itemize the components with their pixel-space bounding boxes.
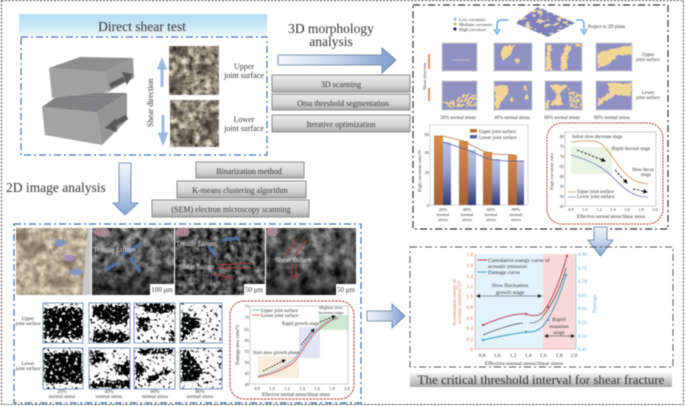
chart: high curvature ratio bars: Lower joint surface xyxy=(479,136,517,141)
chart: high curvature ratio versus stress ratio: 65 xyxy=(560,164,565,169)
chart: high curvature ratio bars: 60 xyxy=(424,132,430,137)
chart: high curvature ratio versus stress ratio: 80 xyxy=(560,134,565,139)
image: SEM tensile and shear failure: 50 μm xyxy=(245,286,264,294)
chart: high curvature ratio versus stress ratio: 2.0 xyxy=(652,207,659,212)
labels: binary row upper: joint surface xyxy=(15,322,41,327)
chart: damage area ratio: Upper joint surface xyxy=(261,309,298,314)
icon: downward shear arrow xyxy=(160,115,166,142)
chart: high curvature ratio versus stress ratio: 0.8 xyxy=(568,207,575,212)
chart: high curvature ratio versus stress ratio: 70 xyxy=(560,154,565,159)
chart: energy and damage curves: Rapid xyxy=(552,317,566,323)
heading: 3D morphology analysis: analysis xyxy=(309,34,353,49)
chart: energy and damage curves: 0 xyxy=(470,347,473,353)
labels: upper joint surface: joint surface xyxy=(635,58,660,63)
chart: high curvature ratio versus stress ratio: 1.8 xyxy=(638,207,645,212)
image: SEM tensile failure xyxy=(92,228,174,295)
method box: Otsu threshold segmentation: Otsu threshold segmentation xyxy=(297,99,389,108)
labels: binary image columns: 60% xyxy=(150,390,160,395)
chart: high curvature ratio bars: 60% xyxy=(487,207,495,212)
labels: binary image columns: normal stress xyxy=(96,395,122,400)
chart: high curvature ratio versus stress ratio xyxy=(547,123,663,224)
chart: damage area ratio: increase stage xyxy=(318,310,344,315)
chart: high curvature ratio bars: 40% xyxy=(463,207,471,212)
chart: energy and damage curves: Cumulative energy curve of xyxy=(488,257,550,264)
chart: high curvature ratio versus stress ratio: 75 xyxy=(560,144,565,149)
chart: energy and damage curves: 1.6 xyxy=(540,353,547,359)
method box: K-means clustering algorithm xyxy=(177,181,306,198)
image: SEM tensile failure: Tensile failure xyxy=(93,245,137,254)
arrow: right projection xyxy=(576,20,587,34)
chart: high curvature ratio bars: 20% xyxy=(439,207,447,212)
labels: binary image columns: 80% xyxy=(195,390,205,395)
chart: energy and damage curves: 0.55 xyxy=(578,320,587,326)
chart: damage area ratio: Start slow growth phase xyxy=(253,351,299,356)
icon: shear specimen blocks xyxy=(42,57,134,145)
chart: energy and damage curves: growth stage xyxy=(496,290,525,296)
heading: 3D morphology analysis: 3D morphology xyxy=(288,21,374,36)
label: project to 2D plane: Project to 2D plane xyxy=(588,25,625,30)
labels: lower joint surface: Lower xyxy=(642,91,655,96)
chart: energy and damage curves: 1.4 xyxy=(525,353,532,359)
labels: binary row lower: Lower xyxy=(21,362,35,367)
image: joint surface photo xyxy=(15,228,91,295)
method box: K-means clustering algorithm: K-means clustering algorithm xyxy=(192,186,289,195)
label: upper joint surface: Upper xyxy=(234,62,254,71)
chart: high curvature ratio bars: stress xyxy=(438,217,448,222)
panel: direct shear test xyxy=(19,14,267,155)
chart: damage area ratio: 0.8 xyxy=(254,386,261,391)
chart: damage area ratio: 1.0 xyxy=(269,386,276,391)
chart: high curvature ratio versus stress ratio: Upper joint surface xyxy=(577,190,614,195)
chart: damage area ratio: 65 xyxy=(244,327,250,332)
image: SEM tensile failure: 100 μm xyxy=(151,286,173,294)
labels: normal stress columns: 20% normal stress xyxy=(440,116,476,121)
chart: high curvature ratio versus stress ratio: 1.2 xyxy=(596,207,602,212)
method box: binarization method xyxy=(196,162,304,178)
image: SEM tensile and shear failure: Tensile failure xyxy=(176,240,216,248)
chart: damage area ratio: 60 xyxy=(244,338,250,343)
chart: damage area ratio: Rapid growth stage xyxy=(282,322,319,327)
chart: damage area ratio: Lower joint surface xyxy=(261,314,299,319)
image: upper joint surface xyxy=(168,45,219,95)
panel: 3D morphology results xyxy=(413,5,668,229)
labels: binary row lower: joint surface xyxy=(15,367,41,372)
dash-dot frame of test panel xyxy=(21,37,267,155)
chart: high curvature ratio versus stress ratio: 60 xyxy=(560,174,565,179)
chart: high curvature ratio bars: normal xyxy=(461,212,474,217)
labels: binary image columns: normal stress xyxy=(142,395,168,400)
chart: energy and damage curves: 1.6 xyxy=(467,263,473,269)
chart: damage area ratio: 50 xyxy=(244,360,250,365)
chart: high curvature ratio bars: 20 xyxy=(424,170,430,175)
label: upper joint surface: joint surface xyxy=(223,71,264,80)
chart: high curvature ratio bars: 80% xyxy=(512,207,520,212)
chart: damage area ratio: 75 xyxy=(244,304,250,309)
chart: energy and damage curves: Damage curve xyxy=(488,270,520,276)
labels: binary image columns: normal stress xyxy=(49,395,75,400)
chart: high curvature ratio versus stress ratio: stage xyxy=(641,173,651,178)
chart: high curvature ratio versus stress ratio: 55 xyxy=(560,184,565,189)
chart: energy and damage curves: Slow fluctuation xyxy=(492,282,529,289)
legend: curvature classes: High curvature xyxy=(459,27,486,32)
chart: energy and damage curves: 0.2 xyxy=(467,337,473,343)
chart: energy and damage curves: 0.75 xyxy=(578,266,587,272)
chart: energy and damage curves: 0.4 xyxy=(467,326,473,332)
chart: high curvature ratio bars: normal xyxy=(510,212,523,217)
binary images: lower row xyxy=(43,348,222,389)
chart: high curvature ratio bars: stress xyxy=(462,217,472,222)
panel: critical threshold interval xyxy=(410,247,673,387)
chart: high curvature ratio versus stress ratio: Lower joint surface xyxy=(577,195,615,200)
chart: damage area ratio: Damage area ratio/% xyxy=(236,325,241,365)
method box: Otsu threshold segmentation xyxy=(272,94,410,110)
chart: energy and damage curves: 1.0 xyxy=(494,353,501,359)
heading band: critical threshold interval: The critical threshold interval for shear fracture xyxy=(418,372,665,387)
labels: binary image columns: normal stress xyxy=(187,395,213,400)
image: SEM shear failure: Shear failure xyxy=(275,256,311,264)
chart: damage area ratio: 55 xyxy=(244,349,250,354)
chart: energy and damage curves: 1.2 xyxy=(510,353,517,359)
chart: high curvature ratio versus stress ratio: Initial slow decrease stage xyxy=(572,135,622,140)
arrow: left projection xyxy=(494,20,509,34)
chart: high curvature ratio bars: Upper joint surface xyxy=(479,130,516,135)
label: shear direction: Shear direction xyxy=(422,62,427,90)
chart: high curvature ratio versus stress ratio: 45 xyxy=(560,204,565,209)
arrow: 2D analysis to threshold xyxy=(367,304,405,328)
method box: iterative optimization xyxy=(272,115,410,132)
chart: energy and damage curves: 0.8 xyxy=(479,353,486,359)
image: SEM tensile and shear failure xyxy=(175,228,265,295)
method box: 3D scanning: 3D scanning xyxy=(321,80,361,89)
labels: lower joint surface: joint surface xyxy=(635,96,660,101)
chart: high curvature ratio bars xyxy=(417,125,528,222)
chart: high curvature ratio bars: normal xyxy=(485,212,498,217)
label: lower joint surface: joint surface xyxy=(223,124,264,133)
chart: high curvature ratio versus stress ratio: 1.4 xyxy=(610,207,617,212)
chart: damage area ratio: 1.4 xyxy=(299,386,306,391)
chart: high curvature ratio versus stress ratio: Slow decay xyxy=(632,168,655,173)
method box: iterative optimization: Iterative optimization xyxy=(306,120,376,129)
labels: binary image columns xyxy=(49,390,213,400)
dash-dot frame of threshold panel xyxy=(410,247,673,367)
chart: energy and damage curves: Accumulated energy of xyxy=(453,279,458,326)
labels: normal stress columns: 80% normal stress xyxy=(594,116,630,121)
chart: 3D surface xyxy=(515,6,576,38)
chart: energy and damage curves: 1.4 xyxy=(467,274,473,280)
chart: high curvature ratio bars: stress xyxy=(511,217,521,222)
chart: damage area ratio: 2.0 xyxy=(344,386,351,391)
chart: energy and damage curves: acoustic emission/10⁶ xyxy=(457,280,463,324)
chart: energy and damage curves: 2.0 xyxy=(571,353,578,359)
method box: SEM electron microscopy scanning xyxy=(152,200,309,217)
method box: binarization method: Binarization method xyxy=(216,167,282,176)
chart: high curvature ratio versus stress ratio: Effective normal stress/Shear stress xyxy=(577,215,645,220)
chart: high curvature ratio bars: 0 xyxy=(427,203,430,208)
chart: high curvature ratio versus stress ratio: 50 xyxy=(560,194,565,199)
chart: energy and damage curves: Effective normal stress/Shear stress xyxy=(485,360,563,367)
chart: high curvature ratio versus stress ratio: 1.6 xyxy=(624,207,631,212)
icon: upward shear arrow xyxy=(159,61,165,87)
labels: normal stress columns xyxy=(440,116,630,121)
chart: energy and damage curves: 1.8 xyxy=(467,252,473,258)
heading: 2D image analysis: 2D image analysis xyxy=(6,180,106,195)
chart: high curvature ratio bars: High curvature ratio/% xyxy=(417,149,422,192)
chart: energy and damage curves: mutation xyxy=(549,324,569,330)
chart: energy and damage curves: 0.70 xyxy=(578,279,587,285)
chart: energy and damage curves: 0.8 xyxy=(467,305,473,311)
arrow: morphology to threshold xyxy=(588,227,613,256)
arrow: to 2D image analysis xyxy=(113,163,138,215)
chart: energy and damage curves: 1.8 xyxy=(556,353,563,359)
chart: energy and damage curves: 0.60 xyxy=(578,306,587,312)
labels: normal stress columns: 40% normal stress xyxy=(494,116,530,121)
chart: high curvature ratio bars: 40 xyxy=(424,150,430,155)
labels: normal stress columns: 60% normal stress xyxy=(544,116,580,121)
chart: energy and damage curves: 0.65 xyxy=(578,293,587,299)
labels: binary row upper: Upper xyxy=(22,317,35,322)
chart: high curvature ratio bars: stress xyxy=(486,217,496,222)
chart: energy and damage curves: 0.80 xyxy=(578,252,587,258)
chart: damage area ratio: 40 xyxy=(244,382,250,387)
image: SEM shear failure: 50 μm xyxy=(337,286,356,294)
chart: damage area ratio: 45 xyxy=(244,371,250,376)
label: lower joint surface: Lower xyxy=(234,115,255,124)
chart: high curvature ratio versus stress ratio: High curvature ratio xyxy=(549,152,554,190)
chart: high curvature ratio versus stress ratio: Rapid descent stage xyxy=(612,147,650,152)
chart: high curvature ratio bars: normal xyxy=(437,212,450,217)
legend: curvature classes: Medium curvature xyxy=(459,22,492,27)
image: SEM tensile and shear failure: Shear failure xyxy=(179,263,215,271)
dash-dot frame of 2D panel xyxy=(14,224,361,403)
binary images: upper row xyxy=(43,303,222,343)
chart: damage area ratio: 1.2 xyxy=(284,386,290,391)
chart: energy and damage curves: 1.2 xyxy=(467,284,473,290)
chart: damage area ratio: Effective normal stress/Shear stress xyxy=(262,393,330,398)
labels: binary image columns: 40% xyxy=(104,390,114,395)
chart: damage area ratio: 1.6 xyxy=(314,386,321,391)
image: lower joint surface xyxy=(170,100,219,147)
method box: 3D scanning xyxy=(272,75,410,92)
chart: energy and damage curves: Damage xyxy=(592,294,598,313)
image: SEM shear failure xyxy=(266,228,356,295)
method box: SEM electron microscopy scanning: (SEM) electron microscopy scanning xyxy=(171,205,291,214)
chart: energy and damage curves: 0.6 xyxy=(467,316,473,322)
chart: energy and damage curves: acoustic emission xyxy=(488,264,527,270)
icon: orange direction marks xyxy=(428,54,430,101)
chart: damage area ratio: Highest slow xyxy=(319,305,344,310)
arrow: to 3D morphology xyxy=(278,48,396,73)
heat maps: lower row xyxy=(442,81,632,110)
chart: energy and damage curves: 1.0 xyxy=(467,294,473,300)
heading: direct shear test xyxy=(19,14,267,36)
chart: high curvature ratio versus stress ratio: 1.0 xyxy=(582,207,589,212)
chart: energy and damage curves xyxy=(453,252,598,367)
heat maps: upper row xyxy=(442,43,632,71)
legend: curvature classes xyxy=(453,17,492,32)
chart: damage area ratio: 70 xyxy=(244,315,250,320)
dash-dot frame of morphology panel xyxy=(413,5,668,229)
chart: damage area ratio xyxy=(230,301,354,399)
label: shear direction: Shear direction xyxy=(146,78,155,127)
labels: binary image columns: 20% xyxy=(57,390,67,395)
chart: energy and damage curves: 0.50 xyxy=(578,334,587,340)
chart: energy and damage curves: 0.45 xyxy=(578,347,587,353)
chart: energy and damage curves: stage xyxy=(553,330,565,336)
chart: damage area ratio: 1.8 xyxy=(329,386,336,391)
heading: direct shear test: Direct shear test xyxy=(98,19,186,34)
labels: upper joint surface: Upper xyxy=(642,53,654,58)
legend: curvature classes: Low curvature xyxy=(459,17,485,22)
panel: 2D image analysis results xyxy=(14,224,361,403)
